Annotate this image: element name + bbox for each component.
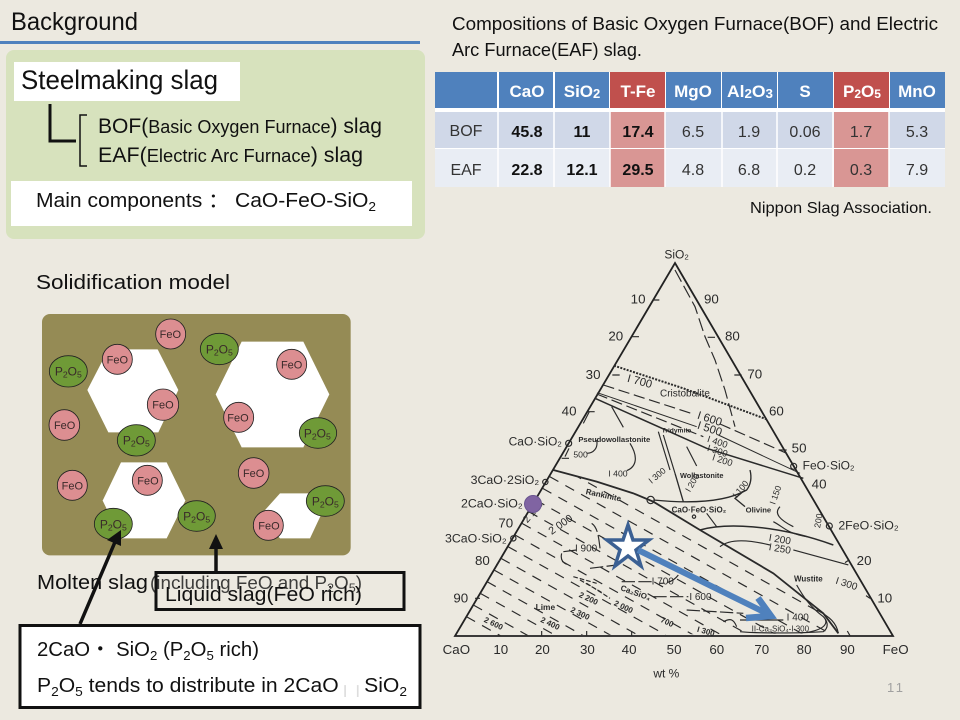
upper diagram lines and labels: I 500 — [696, 420, 723, 439]
callout: 2CaO SiO2: 2CaO・ SiO — [37, 639, 148, 661]
text: BOF slag: BOF(Basic Oxygen Furnace) slag — [98, 115, 382, 138]
table header: 2 — [744, 86, 752, 101]
table row: EAF: 0.3 — [850, 162, 872, 179]
lower diagram lines and labels: 90 — [453, 591, 468, 606]
P2O5 particles: O — [136, 434, 145, 448]
P2O5 particles: 2 — [191, 514, 196, 524]
chart: CaO-FeO-SiO2 ternary phase diagram — [443, 247, 909, 680]
lower diagram lines and labels — [443, 465, 909, 680]
lower diagram lines and labels: 70 — [754, 642, 769, 657]
table header: T-Fe — [621, 82, 655, 101]
upper diagram lines and labels: 30 — [586, 367, 600, 382]
upper diagram lines and labels: Tridymite — [662, 427, 692, 434]
lower diagram lines and labels: I 250 — [768, 542, 792, 557]
arrow: blue composition change — [638, 550, 771, 618]
upper diagram lines and labels: 70 — [747, 366, 762, 381]
callout: 2CaO SiO2: P — [37, 675, 50, 697]
table row: BOF: 11 — [574, 124, 591, 141]
P2O5 particles: P — [123, 434, 131, 448]
upper diagram lines and labels: 20 — [608, 329, 623, 344]
table header: MgO — [674, 82, 712, 101]
table row: BOF — [435, 112, 945, 148]
lower diagram lines and labels: 80 — [797, 642, 811, 657]
callout: 2CaO SiO2: 5 — [206, 648, 214, 663]
lower diagram lines and labels: Olivine — [746, 506, 771, 515]
FeO particles: FeO — [137, 475, 159, 487]
lower diagram lines and labels: 80 — [475, 553, 490, 568]
FeO particles: FeO — [243, 468, 265, 480]
lower diagram lines and labels: 60 — [709, 642, 724, 657]
P2O5 particles: 5 — [228, 347, 233, 357]
table header: 2 — [854, 87, 861, 101]
text: EAF slag: EAF(Electric Arc Furnace) slag — [98, 144, 363, 167]
callout: main components — [11, 181, 412, 226]
lower diagram lines and labels: FeO — [883, 642, 909, 657]
lower diagram lines and labels: I 400 — [787, 613, 809, 624]
table row: EAF: EAF — [450, 162, 482, 179]
upper diagram lines and labels: I 700 — [626, 373, 653, 391]
P2O5 particles — [49, 333, 344, 540]
P2O5 particles: 5 — [326, 431, 331, 441]
dashed isotherms — [467, 476, 826, 636]
P2O5 particles: 5 — [145, 439, 150, 449]
FeO particles: FeO — [54, 420, 76, 432]
table row: EAF: 0.2 — [794, 162, 816, 179]
lower diagram lines and labels: 10 — [877, 591, 892, 606]
marker: BOF star — [607, 525, 649, 566]
table row: BOF: 1.7 — [850, 124, 872, 141]
lower diagram lines and labels: I 200 — [683, 472, 701, 494]
tree connector — [50, 104, 87, 166]
upper diagram lines and labels: 50 — [792, 440, 806, 455]
lower diagram lines and labels: I 700 — [652, 576, 674, 587]
upper diagram lines and labels: 60 — [769, 404, 784, 419]
callout: liquid slag — [156, 572, 404, 610]
table row: BOF: 45.8 — [511, 124, 543, 141]
callout: 2CaO SiO2: 5 — [75, 684, 83, 699]
arrow: to liquid slag — [209, 534, 223, 572]
text: molten slag label: O — [334, 573, 349, 593]
diagram: solidification model — [42, 314, 351, 555]
heading: Solidification model: Solidification model — [36, 272, 230, 294]
text: table caption — [452, 14, 938, 60]
callout: main components: Main components ： CaO-FeO-SiO — [36, 190, 352, 212]
lower diagram lines and labels: I 900 — [575, 544, 598, 555]
hexagon crystals — [87, 342, 329, 538]
table row: EAF — [435, 149, 945, 187]
P2O5 particles: 2 — [320, 499, 325, 509]
heading: Background: Background — [11, 8, 138, 36]
table header: CaO — [510, 82, 544, 101]
lower diagram lines and labels: 200 — [812, 513, 825, 529]
page number: 11 — [887, 680, 903, 695]
lower diagram lines and labels: I 300 — [647, 465, 668, 486]
lower diagram lines and labels: 2 000 — [612, 599, 635, 615]
P2O5 particles: O — [68, 365, 77, 379]
P2O5 particles: P — [100, 517, 108, 531]
upper diagram lines and labels: 10 — [631, 291, 645, 306]
FeO particles: FeO — [160, 329, 181, 341]
P2O5 particles: 5 — [205, 514, 210, 524]
table row: BOF: 1.9 — [738, 124, 760, 141]
panel title: Steelmaking slag: Steelmaking slag — [21, 65, 218, 95]
lower diagram lines and labels: 20 — [535, 642, 550, 657]
lower diagram lines and labels: Rankinite — [585, 487, 622, 504]
upper diagram lines and labels: CaO·SiO₂ — [509, 435, 562, 449]
lower diagram lines and labels: 2 100 — [521, 499, 546, 525]
table row: EAF: 7.9 — [906, 162, 928, 179]
lower diagram lines and labels: CaO·FeO·SiO₂ — [672, 506, 727, 515]
FeO particles — [49, 319, 307, 540]
P2O5 particles: P — [206, 342, 214, 356]
heading: Background — [0, 8, 420, 44]
lower diagram lines and labels: Lime — [536, 602, 555, 612]
lower diagram lines and labels: I 150 — [767, 484, 784, 506]
marker: 2CaO SiO2 purple dot — [524, 496, 542, 512]
callout: 2CaO SiO2: ╷╷SiO — [339, 675, 397, 697]
table header: O — [861, 82, 874, 101]
upper diagram lines and labels — [509, 247, 855, 479]
lower diagram lines and labels: I 100 — [731, 478, 751, 500]
arrow: to P2O5 in crystal — [80, 530, 121, 624]
FeO particles: FeO — [258, 520, 280, 532]
lower diagram lines and labels: wt % — [652, 666, 680, 680]
P2O5 particles: P — [304, 426, 312, 440]
upper diagram lines and labels: 40 — [562, 404, 576, 419]
table row: EAF: 6.8 — [738, 162, 760, 179]
table row: EAF: 4.8 — [682, 162, 704, 179]
lower diagram lines and labels: Ca₂SiO₄ — [619, 583, 652, 603]
upper diagram lines and labels: 90 — [704, 291, 719, 306]
lower diagram lines and labels: 2 000 — [547, 512, 575, 537]
panel title: Steelmaking slag — [14, 62, 240, 101]
text: molten slag label: 5 — [349, 581, 356, 595]
lower diagram lines and labels: 3CaO·2SiO₂ — [471, 473, 539, 487]
FeO particles: FeO — [107, 354, 128, 366]
table header: 3 — [766, 86, 773, 101]
lower diagram lines and labels: 40 — [812, 476, 826, 491]
P2O5 particles: P — [55, 365, 63, 379]
FeO particles: FeO — [281, 359, 303, 371]
lower diagram lines and labels: I 200 — [768, 533, 792, 548]
table row: EAF: 22.8 — [511, 162, 543, 179]
text: molten slag label: 2 — [327, 581, 334, 595]
text: table caption: Compositions of Basic Oxygen Furnace(BOF) and Electric — [452, 14, 938, 34]
lower diagram lines and labels: CaO — [443, 642, 470, 657]
table header: P — [843, 82, 854, 101]
upper diagram lines and labels: I 400 — [608, 469, 628, 479]
lower diagram lines and labels: II-Ca₂SiO₄-I 300 — [752, 624, 810, 633]
table header: MnO — [898, 82, 936, 101]
text: molten slag label: (including FeO and P — [150, 573, 319, 593]
table header: S — [799, 82, 811, 101]
P2O5 particles: 2 — [63, 370, 68, 380]
lower diagram lines and labels: 2 400 — [539, 615, 562, 632]
callout: 2CaO SiO2: (P — [157, 639, 183, 661]
text: molten slag label: Molten slag — [37, 572, 148, 594]
text: source note: Nippon Slag Association. — [750, 200, 932, 217]
upper diagram lines and labels: Cristobalite — [660, 389, 710, 400]
callout: main components: 2 — [368, 199, 376, 214]
P2O5 particles: 5 — [334, 499, 339, 509]
table row: EAF: 29.5 — [622, 162, 654, 179]
table header: 5 — [874, 87, 881, 101]
lower diagram lines and labels: 700 — [659, 615, 676, 629]
P2O5 particles: P — [183, 509, 191, 523]
text: table caption: Arc Furnace(EAF) slag. — [452, 40, 642, 60]
ternary frame — [455, 263, 893, 636]
P2O5 particles: O — [219, 342, 228, 356]
upper diagram lines and labels: I 600 — [696, 410, 723, 429]
P2O5 particles: P — [312, 494, 320, 508]
callout: 2CaO SiO2: 2 — [150, 648, 157, 663]
upper diagram lines and labels: Pseudowollastonite — [578, 435, 650, 444]
FeO particles: FeO — [152, 400, 174, 412]
P2O5 particles: 2 — [131, 439, 136, 449]
lower diagram lines and labels: 30 — [580, 642, 595, 657]
P2O5 particles: 2 — [312, 431, 317, 441]
upper diagram lines and labels: 80 — [725, 329, 740, 344]
lower diagram lines and labels: Wustite — [794, 575, 823, 584]
P2O5 particles: 2 — [108, 522, 113, 532]
lower diagram lines and labels: 40 — [622, 642, 636, 657]
P2O5 particles: O — [113, 517, 122, 531]
lower diagram lines and labels: I 600 — [689, 592, 712, 603]
FeO particles: FeO — [62, 480, 83, 492]
lower diagram lines and labels: 2 300 — [569, 605, 592, 622]
P2O5 particles: O — [317, 426, 326, 440]
callout: 2CaO SiO2: 2 — [183, 648, 191, 663]
callout: 2CaO SiO2: O — [59, 675, 75, 697]
callout: 2CaO SiO2 — [20, 626, 420, 708]
lower diagram lines and labels: 2 200 — [577, 590, 600, 607]
table row: BOF: 17.4 — [622, 124, 654, 141]
table header: O — [752, 82, 766, 101]
table header: 2 — [593, 86, 600, 101]
upper diagram lines and labels: SiO₂ — [664, 247, 689, 261]
callout: 2CaO SiO2: O — [191, 639, 206, 661]
lower diagram lines and labels: 50 — [667, 642, 681, 657]
table row: BOF: BOF — [450, 123, 483, 140]
upper diagram lines and labels: I 400 — [706, 434, 729, 450]
table row: EAF: 12.1 — [566, 162, 598, 179]
FeO particles: FeO — [227, 412, 249, 424]
lower diagram lines and labels: 20 — [857, 553, 871, 568]
table row: BOF: 0.06 — [789, 124, 821, 141]
panel: steelmaking slag — [6, 50, 425, 239]
upper diagram lines and labels: I 200 — [711, 452, 734, 468]
callout: 2CaO SiO2: 2 — [51, 684, 59, 699]
upper diagram lines and labels: 500 — [573, 449, 588, 459]
table header: Al — [727, 82, 744, 101]
lower diagram lines and labels: Wollastonite — [680, 471, 723, 480]
table row: BOF: 5.3 — [906, 124, 928, 141]
table row: BOF: 6.5 — [682, 124, 704, 141]
table header — [435, 72, 945, 108]
lower diagram lines and labels: 2FeO·SiO₂ — [838, 518, 899, 532]
lower diagram lines and labels: I 300 — [834, 576, 859, 593]
lower diagram lines and labels: 2CaO·SiO₂ — [461, 496, 523, 510]
lower diagram lines and labels: 90 — [840, 642, 855, 657]
text: molten slag label: ) — [356, 573, 362, 593]
table header: SiO — [564, 82, 593, 101]
P2O5 particles: O — [325, 494, 334, 508]
lower diagram lines and labels: 3CaO·SiO₂ — [445, 532, 507, 546]
text: molten slag label — [37, 572, 362, 595]
upper diagram lines and labels: I 300 — [706, 443, 729, 459]
P2O5 particles: O — [196, 509, 205, 523]
lower diagram lines and labels: 2 600 — [482, 615, 505, 632]
callout: 2CaO SiO2: 2 — [399, 684, 407, 699]
table: slag compositions — [435, 72, 945, 187]
lower diagram lines and labels: I 300 — [696, 625, 716, 638]
callout: 2CaO SiO2: rich) — [214, 639, 259, 661]
upper diagram lines and labels: FeO·SiO₂ — [803, 458, 855, 472]
P2O5 particles: 5 — [77, 370, 82, 380]
callout: 2CaO SiO2: tends to distribute in 2CaO — [83, 675, 339, 697]
P2O5 particles: 2 — [214, 347, 219, 357]
lower diagram lines and labels: 70 — [498, 515, 513, 530]
callout: liquid slag: Liquid slag(FeO rich) — [165, 584, 362, 606]
lower diagram lines and labels: 10 — [493, 642, 508, 657]
P2O5 particles: 5 — [122, 522, 127, 532]
